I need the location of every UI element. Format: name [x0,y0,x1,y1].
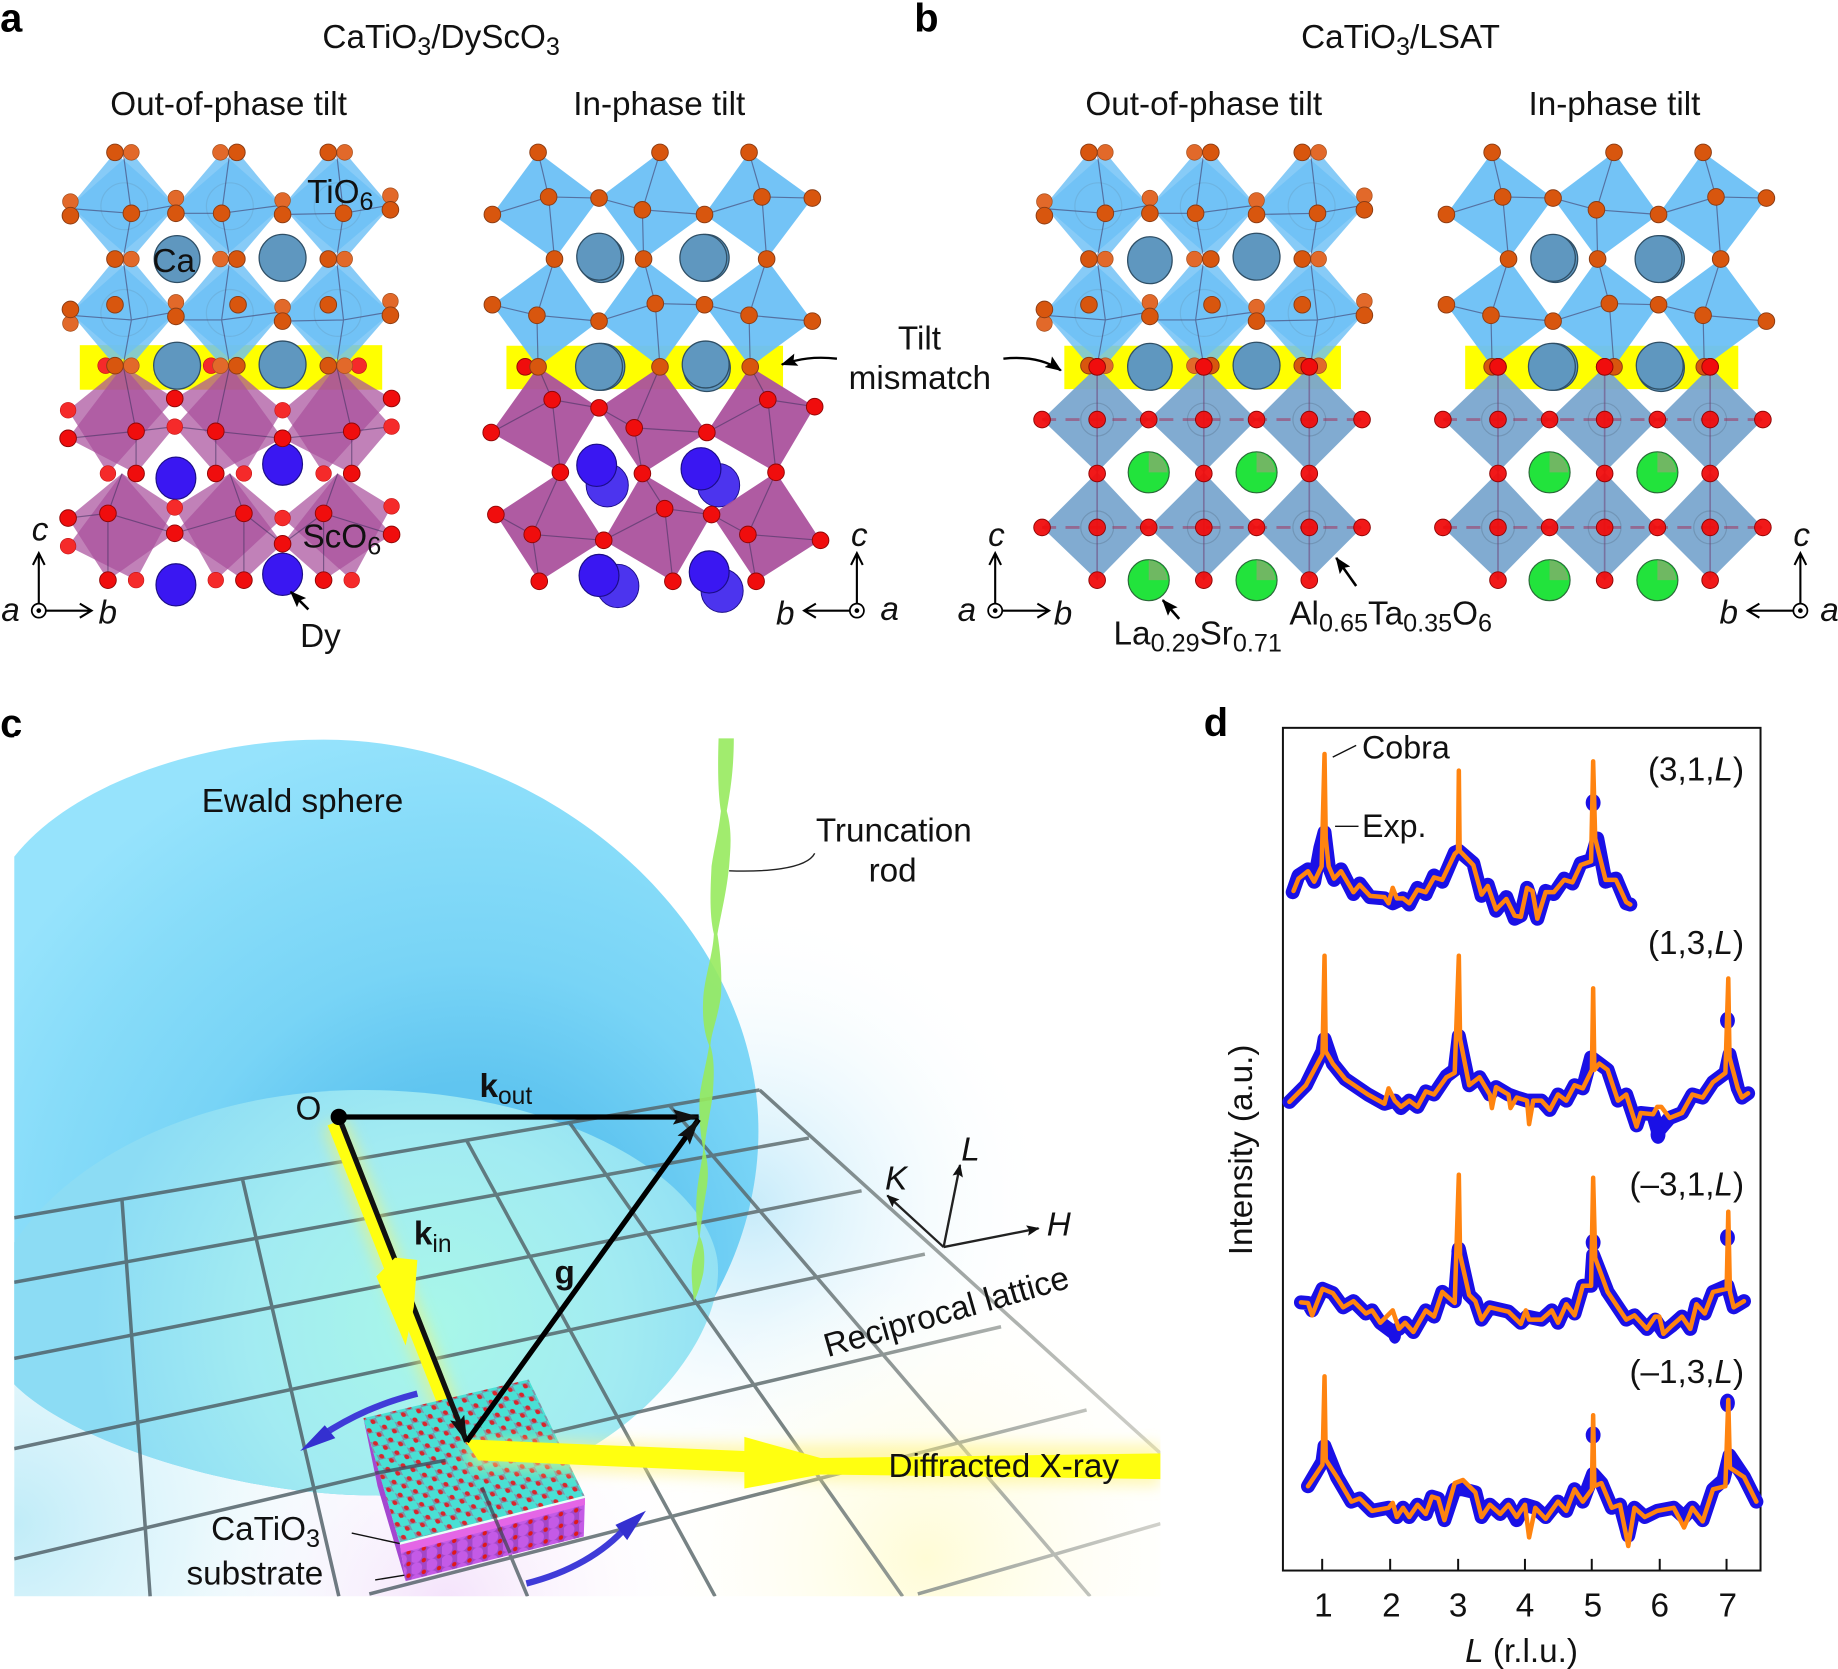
Ewald sphere [14,740,758,1496]
crystal sample [363,1380,585,1581]
label: CaTiO3 substrate [186,1511,404,1593]
origin point O [331,1109,347,1125]
label: Al0.65Ta0.35O6 with arrow [1289,558,1492,638]
truncation rod [692,738,734,1301]
subheading: out-of-phase tilt: Out-of-phase tilt [1085,86,1322,123]
curve (1,3,L) [1289,956,1748,1144]
x-axis tick labels [1314,1587,1737,1624]
label: TiO6: 6 [360,188,374,216]
label: diffracted X-ray: Diffracted X-ray [889,1448,1119,1485]
panel c: Ewald sphere scattering geometry [0,702,1160,1596]
label: Ca: Ca [152,243,196,280]
tilt mismatch callout: Tilt [898,320,941,357]
heading: CaTiO3/DyScO3: 3 [546,33,560,61]
panel d: intensity profiles [1204,701,1761,1669]
subheading: in-phase tilt: In-phase tilt [573,86,745,123]
reciprocal axes H K L [885,1131,1072,1247]
reciprocal axes H K L: L [961,1131,980,1168]
heading: CaTiO3/LSAT: CaTiO [1301,19,1396,56]
axes: a b c right: b [776,596,795,633]
x-axis tick labels: 1 [1314,1587,1333,1624]
label: Dy with arrow: Dy [300,618,341,655]
label: La0.29Sr0.71 with arrow: La [1114,616,1151,653]
axes: a b c left: b [1054,596,1072,633]
subheading: out-of-phase tilt: Out-of-phase tilt [110,86,347,123]
reciprocal axes H K L: K [885,1161,909,1198]
axes: a b c right: c [851,517,868,554]
label: Ewald sphere: Ewald sphere [202,783,403,820]
axes: a b c left: c [988,517,1005,554]
x-axis tick labels: 4 [1516,1587,1534,1624]
label: Al0.65Ta0.35O6 with arrow: 0.35 [1403,610,1452,638]
axes: a b c left [958,517,1072,633]
label: truncation rod: Truncation [816,813,972,850]
x-axis tick labels: 6 [1650,1587,1669,1624]
x-axis tick labels: 7 [1718,1587,1737,1624]
x-axis tick labels: 3 [1449,1587,1467,1624]
panel label d: d [1204,701,1228,745]
curve (-1,3,L) [1308,1376,1756,1546]
intersection disc [14,1090,718,1496]
legend: Cobra and Exp.: Exp. [1362,808,1427,844]
label: Al0.65Ta0.35O6 with arrow: Ta [1368,596,1404,633]
label: CaTiO3 substrate: CaTiO [211,1511,306,1548]
label: La0.29Sr0.71 with arrow: 0.29 [1151,630,1200,658]
axes: a b c right [1720,517,1838,632]
label: truncation rod: rod [869,852,917,889]
reciprocal lattice grid [14,1090,1160,1596]
curve (3,1,L) [1293,754,1630,919]
tilt mismatch callout [782,320,1061,397]
label: La0.29Sr0.71 with arrow [1114,600,1282,658]
x-axis title: L (r.l.u.) [1465,1633,1578,1669]
incident X-ray beam [334,1123,461,1444]
reflection labels [1629,752,1744,1391]
legend: Cobra and Exp. [1333,729,1450,844]
reflection labels: (–1,3,L) [1629,1354,1744,1391]
panel label c: c [0,702,22,746]
axes: a b c left [1,511,117,632]
heading: CaTiO3/DyScO3: 3 [417,33,431,61]
label: CaTiO3 substrate: substrate [186,1556,323,1593]
axes: a b c right [776,517,899,633]
yellow arrowhead on incident beam [376,1258,417,1346]
axes: a b c right: a [880,591,899,628]
axes: a b c left: a [958,592,976,629]
vector k_out [339,1115,699,1119]
structure: in-phase CaTiO3/DyScO3 [483,144,829,612]
label: Al0.65Ta0.35O6 with arrow: Al [1289,596,1319,633]
label: CaTiO3 substrate: 3 [306,1525,320,1553]
label: TiO6: TiO [307,174,360,211]
subheading: in-phase tilt: In-phase tilt [1528,86,1700,123]
label: k_out: out [498,1083,532,1110]
reflection labels: (–3,1,L) [1629,1166,1744,1203]
label: ScO6: ScO [303,518,367,555]
label: reciprocal lattice: Reciprocal lattice [820,1260,1073,1365]
axes: a b c left: c [32,511,49,548]
label: O: O [295,1090,321,1127]
rotation arrows [300,1394,646,1583]
vector k_in [339,1117,467,1442]
label: g: g [554,1254,575,1291]
label: Al0.65Ta0.35O6 with arrow: O [1452,596,1478,633]
heading: CaTiO3/LSAT: 3 [1396,33,1410,61]
diffracted X-ray beam [464,1437,1160,1489]
label: Al0.65Ta0.35O6 with arrow: 0.65 [1319,610,1368,638]
x-axis tick labels: 2 [1382,1587,1401,1624]
legend: Cobra and Exp.: Cobra [1362,729,1450,765]
axes: a b c right: b [1720,595,1738,632]
heading: CaTiO3/LSAT: /LSAT [1410,19,1500,56]
heading: CaTiO3/DyScO3: /DyScO [431,19,546,56]
structure: in-phase CaTiO3/LSAT [1435,144,1775,601]
axes: a b c right: c [1793,517,1810,554]
curve (-3,1,L) [1301,1175,1744,1344]
panel b: CaTiO3/LSAT structures [914,0,1838,658]
label: k_in: k [414,1216,433,1253]
reciprocal axes H K L: H [1047,1206,1072,1243]
y-axis title: Intensity (a.u.) [1223,1044,1260,1255]
label: k_out: k [479,1068,498,1105]
heading: CaTiO3/DyScO3: CaTiO [322,19,417,56]
x-axis tick labels: 5 [1584,1587,1602,1624]
vector g [467,1119,699,1442]
axes: a b c left: b [99,595,117,632]
structure: out-of-phase CaTiO3/LSAT [1034,144,1373,601]
reflection labels: (3,1,L) [1648,752,1744,789]
label: ScO6: 6 [367,532,381,560]
axes: a b c left: a [1,592,20,629]
scene background and sphere [14,736,1160,1596]
reflection labels: (1,3,L) [1648,925,1744,962]
structure: out-of-phase CaTiO3/DyScO3 [60,144,400,606]
panel a: CaTiO3/DyScO3 structures [0,0,899,655]
tilt mismatch callout: mismatch [849,360,991,397]
label: La0.29Sr0.71 with arrow: Sr [1200,616,1233,653]
label: truncation rod [729,813,972,889]
label: k_in: in [432,1231,452,1258]
label: Al0.65Ta0.35O6 with arrow: 6 [1478,610,1492,638]
plot frame and ticks [1283,728,1761,1571]
label: La0.29Sr0.71 with arrow: 0.71 [1233,630,1282,658]
label: Dy with arrow [291,592,341,655]
